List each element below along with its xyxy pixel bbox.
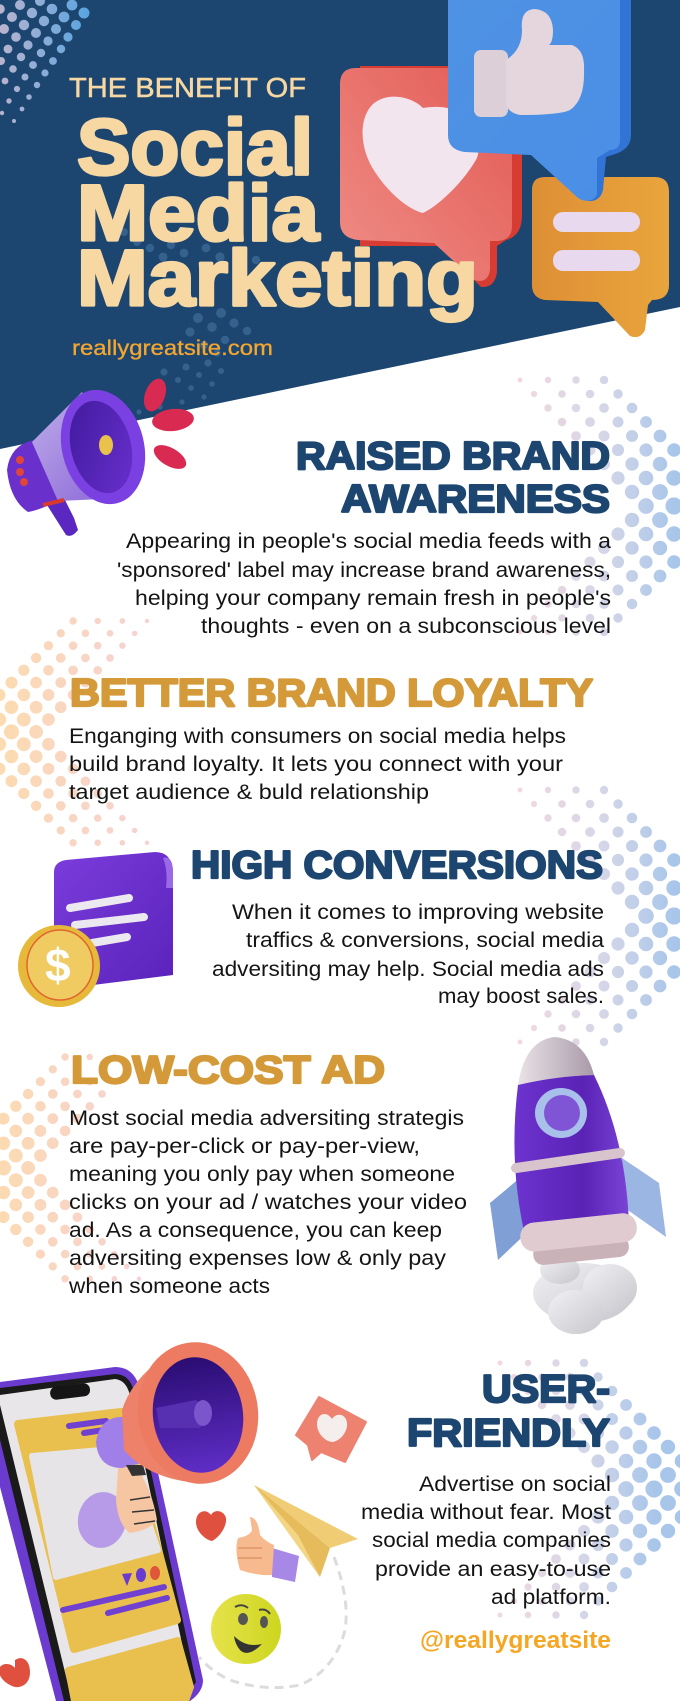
icon: rocket window: [535, 1088, 587, 1138]
title line 3: Marketing: [77, 233, 478, 322]
body text: traffics & conversions, social media: [246, 929, 604, 952]
body text: thoughts - even on a subconscious level: [201, 615, 611, 638]
halftone dots: top left: [0, 0, 90, 123]
kicker: THE BENEFIT OF: [69, 72, 306, 103]
halftone dots: low-cost ad: [0, 1053, 141, 1282]
icon: orange chat bubble: [532, 177, 669, 337]
body text: When it comes to improving website: [232, 901, 604, 924]
body text: [212, 901, 604, 1008]
icon: thumbs-up hand: [236, 1517, 299, 1582]
yellow card top: [18, 1412, 177, 1649]
halftone dots: raised brand awareness: [518, 376, 680, 636]
icon: purple document with coin: [18, 852, 173, 1007]
body text: target audience & buld relationship: [69, 781, 429, 804]
icon: winking emoji: [211, 1594, 281, 1664]
body text: meaning you only pay when someone: [69, 1163, 455, 1186]
heading: BETTER BRAND LOYALTY: [70, 672, 593, 715]
icon: blue thumbs-up bubble: [448, 0, 631, 201]
icon: white heart: [363, 97, 479, 213]
halftone dots: better brand loyalty: [0, 617, 149, 846]
icon: smartphone with megaphone: [0, 1334, 267, 1701]
body text: [68, 1107, 467, 1298]
body text: build brand loyalty. It lets you connect with your: [69, 753, 563, 776]
icon: purple megaphone: [7, 376, 195, 536]
heading: HIGH CONVERSIONS: [191, 844, 603, 887]
icon: dollar coin: $: [45, 939, 71, 991]
dashed flight path: [199, 1557, 346, 1688]
halftone dots: faint behind title: [120, 228, 260, 415]
notch: [49, 1383, 91, 1400]
body text: provide an easy-to-use: [375, 1558, 611, 1581]
body text: Most social media adversiting strategis: [69, 1107, 464, 1130]
yellow card bottom: [68, 1640, 191, 1701]
icon: heart chat bubble: [296, 1397, 366, 1462]
body text: helping your company remain fresh in people's: [135, 587, 611, 610]
social handle: @reallygreatsite: [420, 1627, 611, 1654]
body text: may boost sales.: [438, 985, 604, 1008]
halftone dots: high conversions: [518, 786, 680, 1046]
halftone dots: user friendly: [498, 1359, 680, 1619]
body text: 'sponsored' label may increase brand awareness,: [117, 559, 611, 582]
icon: red heart bubble: [340, 66, 522, 287]
heading: FRIENDLY: [407, 1412, 610, 1455]
header navy background: [0, 0, 680, 449]
body text: [69, 725, 566, 804]
icon: bottom heart: [0, 1658, 30, 1687]
body text: ad platform.: [491, 1586, 611, 1609]
body text: Advertise on social: [419, 1473, 611, 1496]
body text: Enganging with consumers on social media helps: [69, 725, 566, 748]
section: high conversions: [191, 844, 604, 1008]
heading: USER-: [482, 1368, 610, 1411]
sleeve and hand: [74, 1465, 157, 1552]
body text: media without fear. Most: [361, 1501, 611, 1524]
body text: ad. As a consequence, you can keep: [69, 1219, 442, 1242]
icon: paper airplane: [254, 1485, 358, 1577]
icon: rocket: [490, 1037, 666, 1334]
icon: red heart: [196, 1511, 226, 1541]
white picture: [32, 1448, 158, 1577]
icon: thumb: [474, 9, 584, 117]
heading: RAISED BRAND: [296, 435, 610, 478]
title line 2: Media: [77, 168, 320, 257]
body text: clicks on your ad / watches your video: [69, 1191, 467, 1214]
heading: [407, 1368, 610, 1455]
body text: social media companies: [372, 1529, 611, 1552]
section: raised brand awareness: [117, 435, 611, 638]
body text: Appearing in people's social media feeds with a: [126, 530, 611, 553]
section: user-friendly: [361, 1368, 611, 1654]
section: low-cost ad: [68, 1049, 467, 1298]
icon: smoke: [533, 1256, 637, 1334]
website link: reallygreatsite.com: [72, 337, 273, 360]
heading: AWARENESS: [341, 478, 610, 521]
body text: [361, 1473, 611, 1609]
body text: [117, 530, 611, 638]
body text: adversiting may help. Social media ads: [212, 958, 604, 981]
body text: when someone acts: [68, 1275, 270, 1298]
heading: LOW-COST AD: [71, 1049, 385, 1092]
megaphone: [96, 1334, 267, 1492]
body text: are pay-per-click or pay-per-view,: [69, 1135, 420, 1158]
section: better brand loyalty: [69, 672, 593, 804]
title block: [69, 72, 478, 322]
title line 1: Social: [77, 102, 313, 191]
body text: adversiting expenses low & only pay: [69, 1247, 447, 1270]
heading: [296, 435, 610, 521]
icon: dollar coin: [18, 925, 100, 1007]
